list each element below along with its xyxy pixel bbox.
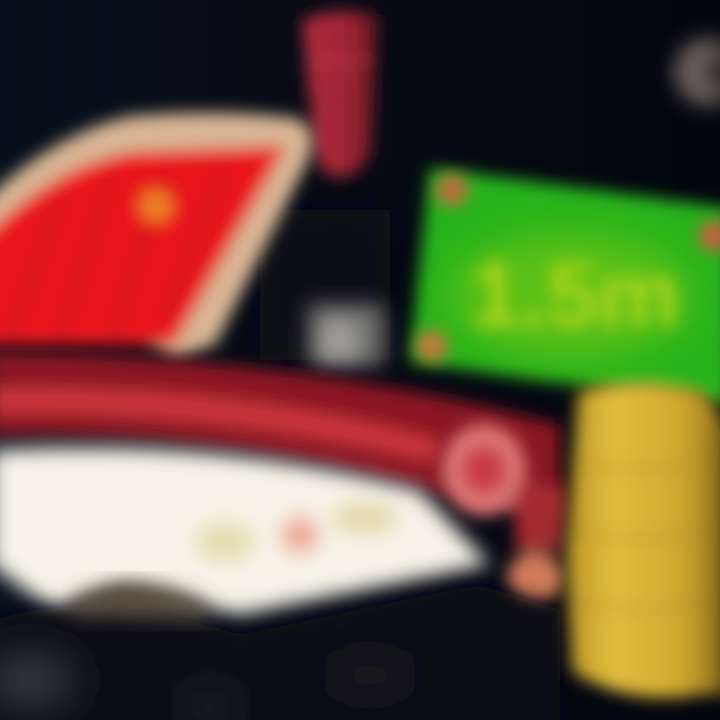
note body (410, 168, 720, 405)
grey foreground haze (0, 652, 415, 719)
gold coin stack (566, 382, 720, 698)
dark table foreground (0, 585, 560, 720)
card pip (281, 516, 319, 554)
card tint (195, 522, 255, 562)
note centre glow (450, 233, 690, 357)
white cards on table (0, 447, 490, 615)
red poker chips (442, 424, 563, 604)
red table rail (0, 352, 560, 520)
dark centre column (260, 210, 390, 360)
note value: 1.5m (470, 244, 680, 346)
top right grey circle (674, 38, 720, 106)
table mid shadow (70, 582, 215, 620)
green banknote (410, 168, 720, 405)
card border (0, 112, 312, 358)
card stripes (10, 165, 225, 340)
rail highlight (0, 387, 440, 462)
card face (0, 146, 286, 345)
red card with cream border (0, 112, 312, 358)
card diamond (140, 190, 172, 222)
note corner dots (416, 174, 720, 362)
grey object (308, 304, 384, 366)
red chip stack (302, 11, 378, 178)
